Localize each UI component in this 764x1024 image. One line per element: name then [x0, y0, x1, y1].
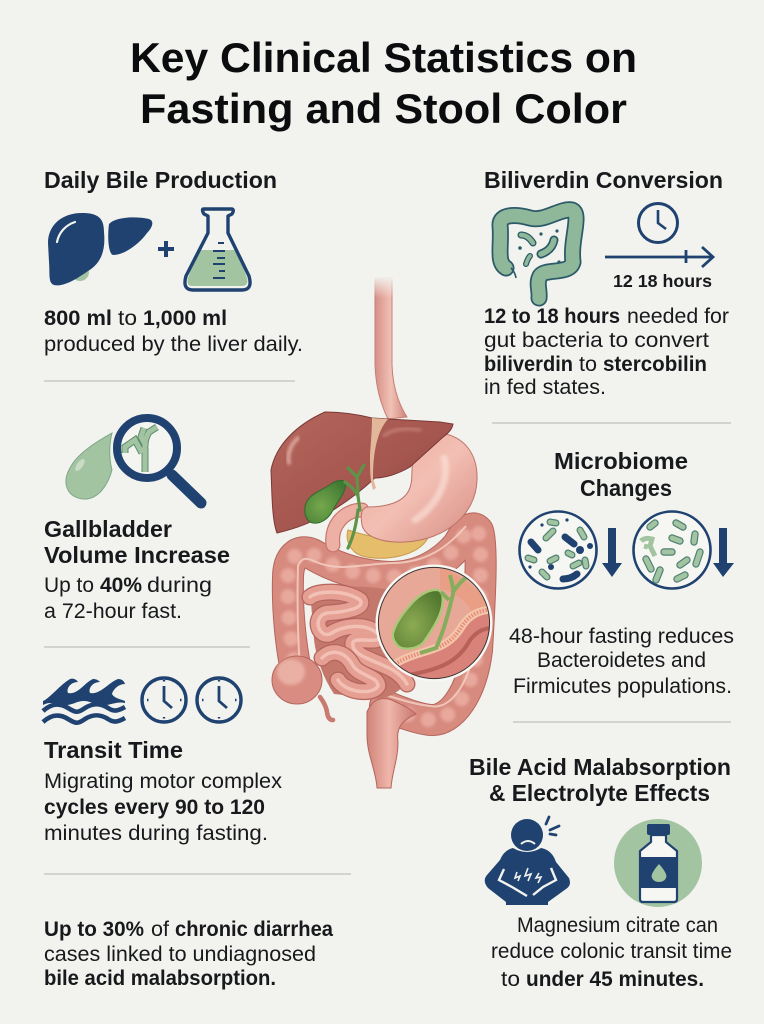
text: transit statistic [44, 769, 282, 845]
text: biliverdin statistic: needed for [627, 304, 729, 328]
text: gallbladder statistic: Up to [44, 573, 94, 597]
heading: gallbladder volume increase: Volume Increase [44, 542, 230, 568]
text: magnesium citrate statistic [491, 913, 732, 991]
icon: colon with bacteria [500, 210, 576, 298]
icon: person with abdominal pain [485, 817, 570, 905]
arrow: time [605, 247, 713, 267]
icon: clock two [197, 678, 241, 722]
icon: gallbladder with magnifier [66, 418, 201, 503]
text: gallbladder statistic: 40% [100, 574, 142, 597]
text: bile volume: produced by the liver daily. [44, 332, 303, 356]
icon: liver [48, 213, 152, 285]
pancreas [347, 530, 428, 558]
text: biliverdin statistic: biliverdin [484, 353, 573, 376]
heading: transit time: Transit Time [44, 737, 183, 763]
arrow: decrease one [602, 528, 622, 577]
illustration: digestive system [271, 276, 495, 788]
text: bile volume: 800 ml [44, 307, 112, 330]
text: bile volume [44, 306, 303, 356]
panel: transit time [43, 678, 282, 845]
text: chronic diarrhea statistic: bile acid malabsorption. [44, 967, 276, 990]
text: magnesium citrate statistic: reduce colonic transit time [491, 939, 732, 963]
colon [288, 526, 481, 720]
title [130, 34, 637, 132]
icon: magnesium citrate bottle [614, 819, 702, 907]
text: bile volume: to [118, 306, 137, 330]
heading: biliverdin conversion: Biliverdin Conversion [484, 167, 723, 193]
icon: clock one [142, 678, 186, 722]
text: biliverdin statistic: 12 to 18 hours [484, 305, 620, 328]
heading: microbiome changes: Microbiome [554, 448, 688, 474]
text: magnesium citrate statistic: Magnesium citrate can [517, 913, 718, 937]
text: biliverdin statistic: in fed states. [484, 375, 606, 399]
icon: plus [158, 241, 174, 257]
text: bile volume: 1,000 ml [143, 307, 227, 330]
cecum and appendix [272, 656, 333, 720]
text: transit statistic: Migrating motor complex [44, 769, 282, 793]
small intestine [310, 586, 410, 699]
text: biliverdin statistic: stercobilin [603, 353, 707, 376]
esophagus [372, 276, 407, 419]
stomach [333, 433, 477, 545]
panel: microbiome changes [509, 448, 734, 698]
icon: flask [185, 209, 250, 290]
heading: daily bile production: Daily Bile Production [44, 167, 277, 193]
text: chronic diarrhea statistic: cases linked to undiagnosed [44, 942, 316, 966]
title: Key Clinical Statistics on [130, 34, 637, 81]
text: chronic diarrhea statistic: of [151, 917, 169, 941]
text: gallbladder statistic [44, 573, 212, 623]
panel: daily bile production [44, 167, 303, 356]
text: microbiome statistic [509, 624, 734, 698]
text: biliverdin statistic: to [579, 352, 597, 376]
heading: microbiome changes: Changes [580, 475, 672, 501]
heading: bile acid malabsorption [469, 754, 731, 806]
panel: gallbladder volume increase [44, 418, 230, 623]
title: Fasting and Stool Color [140, 85, 627, 132]
text: transit statistic: cycles every 90 to 120 [44, 796, 265, 819]
heading: bile acid malabsorption: & Electrolyte Effects [489, 780, 710, 806]
heading: microbiome changes [554, 448, 688, 501]
text: gallbladder statistic: during [147, 573, 212, 597]
text: microbiome statistic: Firmicutes populations. [513, 674, 732, 698]
heading: bile acid malabsorption: Bile Acid Malabsorption [469, 754, 731, 780]
icon: reduced bacteria dish [634, 512, 710, 588]
text: magnesium citrate statistic: under 45 minutes. [526, 968, 704, 991]
icon: diverse bacteria dish [520, 512, 596, 588]
text: chronic diarrhea statistic: chronic diarrhea [175, 918, 333, 941]
text: biliverdin statistic: gut bacteria to convert [484, 328, 709, 352]
gallbladder and bile duct [305, 465, 364, 548]
text: magnesium citrate statistic: to [501, 967, 520, 991]
text: transit statistic: minutes during fasting. [44, 821, 268, 845]
text: chronic diarrhea statistic [44, 917, 333, 990]
label: 12 18 hours: 12 18 hours [613, 271, 712, 291]
liver [271, 412, 453, 533]
heading: gallbladder volume increase: Gallbladder [44, 516, 172, 542]
rectum [367, 698, 416, 788]
arrow: decrease two [713, 528, 734, 577]
heading: gallbladder volume increase [44, 516, 230, 568]
text: biliverdin statistic [484, 304, 729, 399]
icon: clock [638, 204, 678, 242]
panel: bile acid malabsorption and electrolyte effects [469, 754, 732, 991]
text: microbiome statistic: Bacteroidetes and [537, 648, 706, 672]
icon: waves [43, 679, 125, 723]
text: microbiome statistic: 48-hour fasting reduces [509, 624, 734, 648]
magnified gallbladder inset [376, 564, 492, 680]
text: chronic diarrhea statistic: Up to 30% [44, 918, 144, 941]
panel: biliverdin conversion [484, 167, 729, 399]
text: gallbladder statistic: a 72-hour fast. [44, 599, 182, 623]
